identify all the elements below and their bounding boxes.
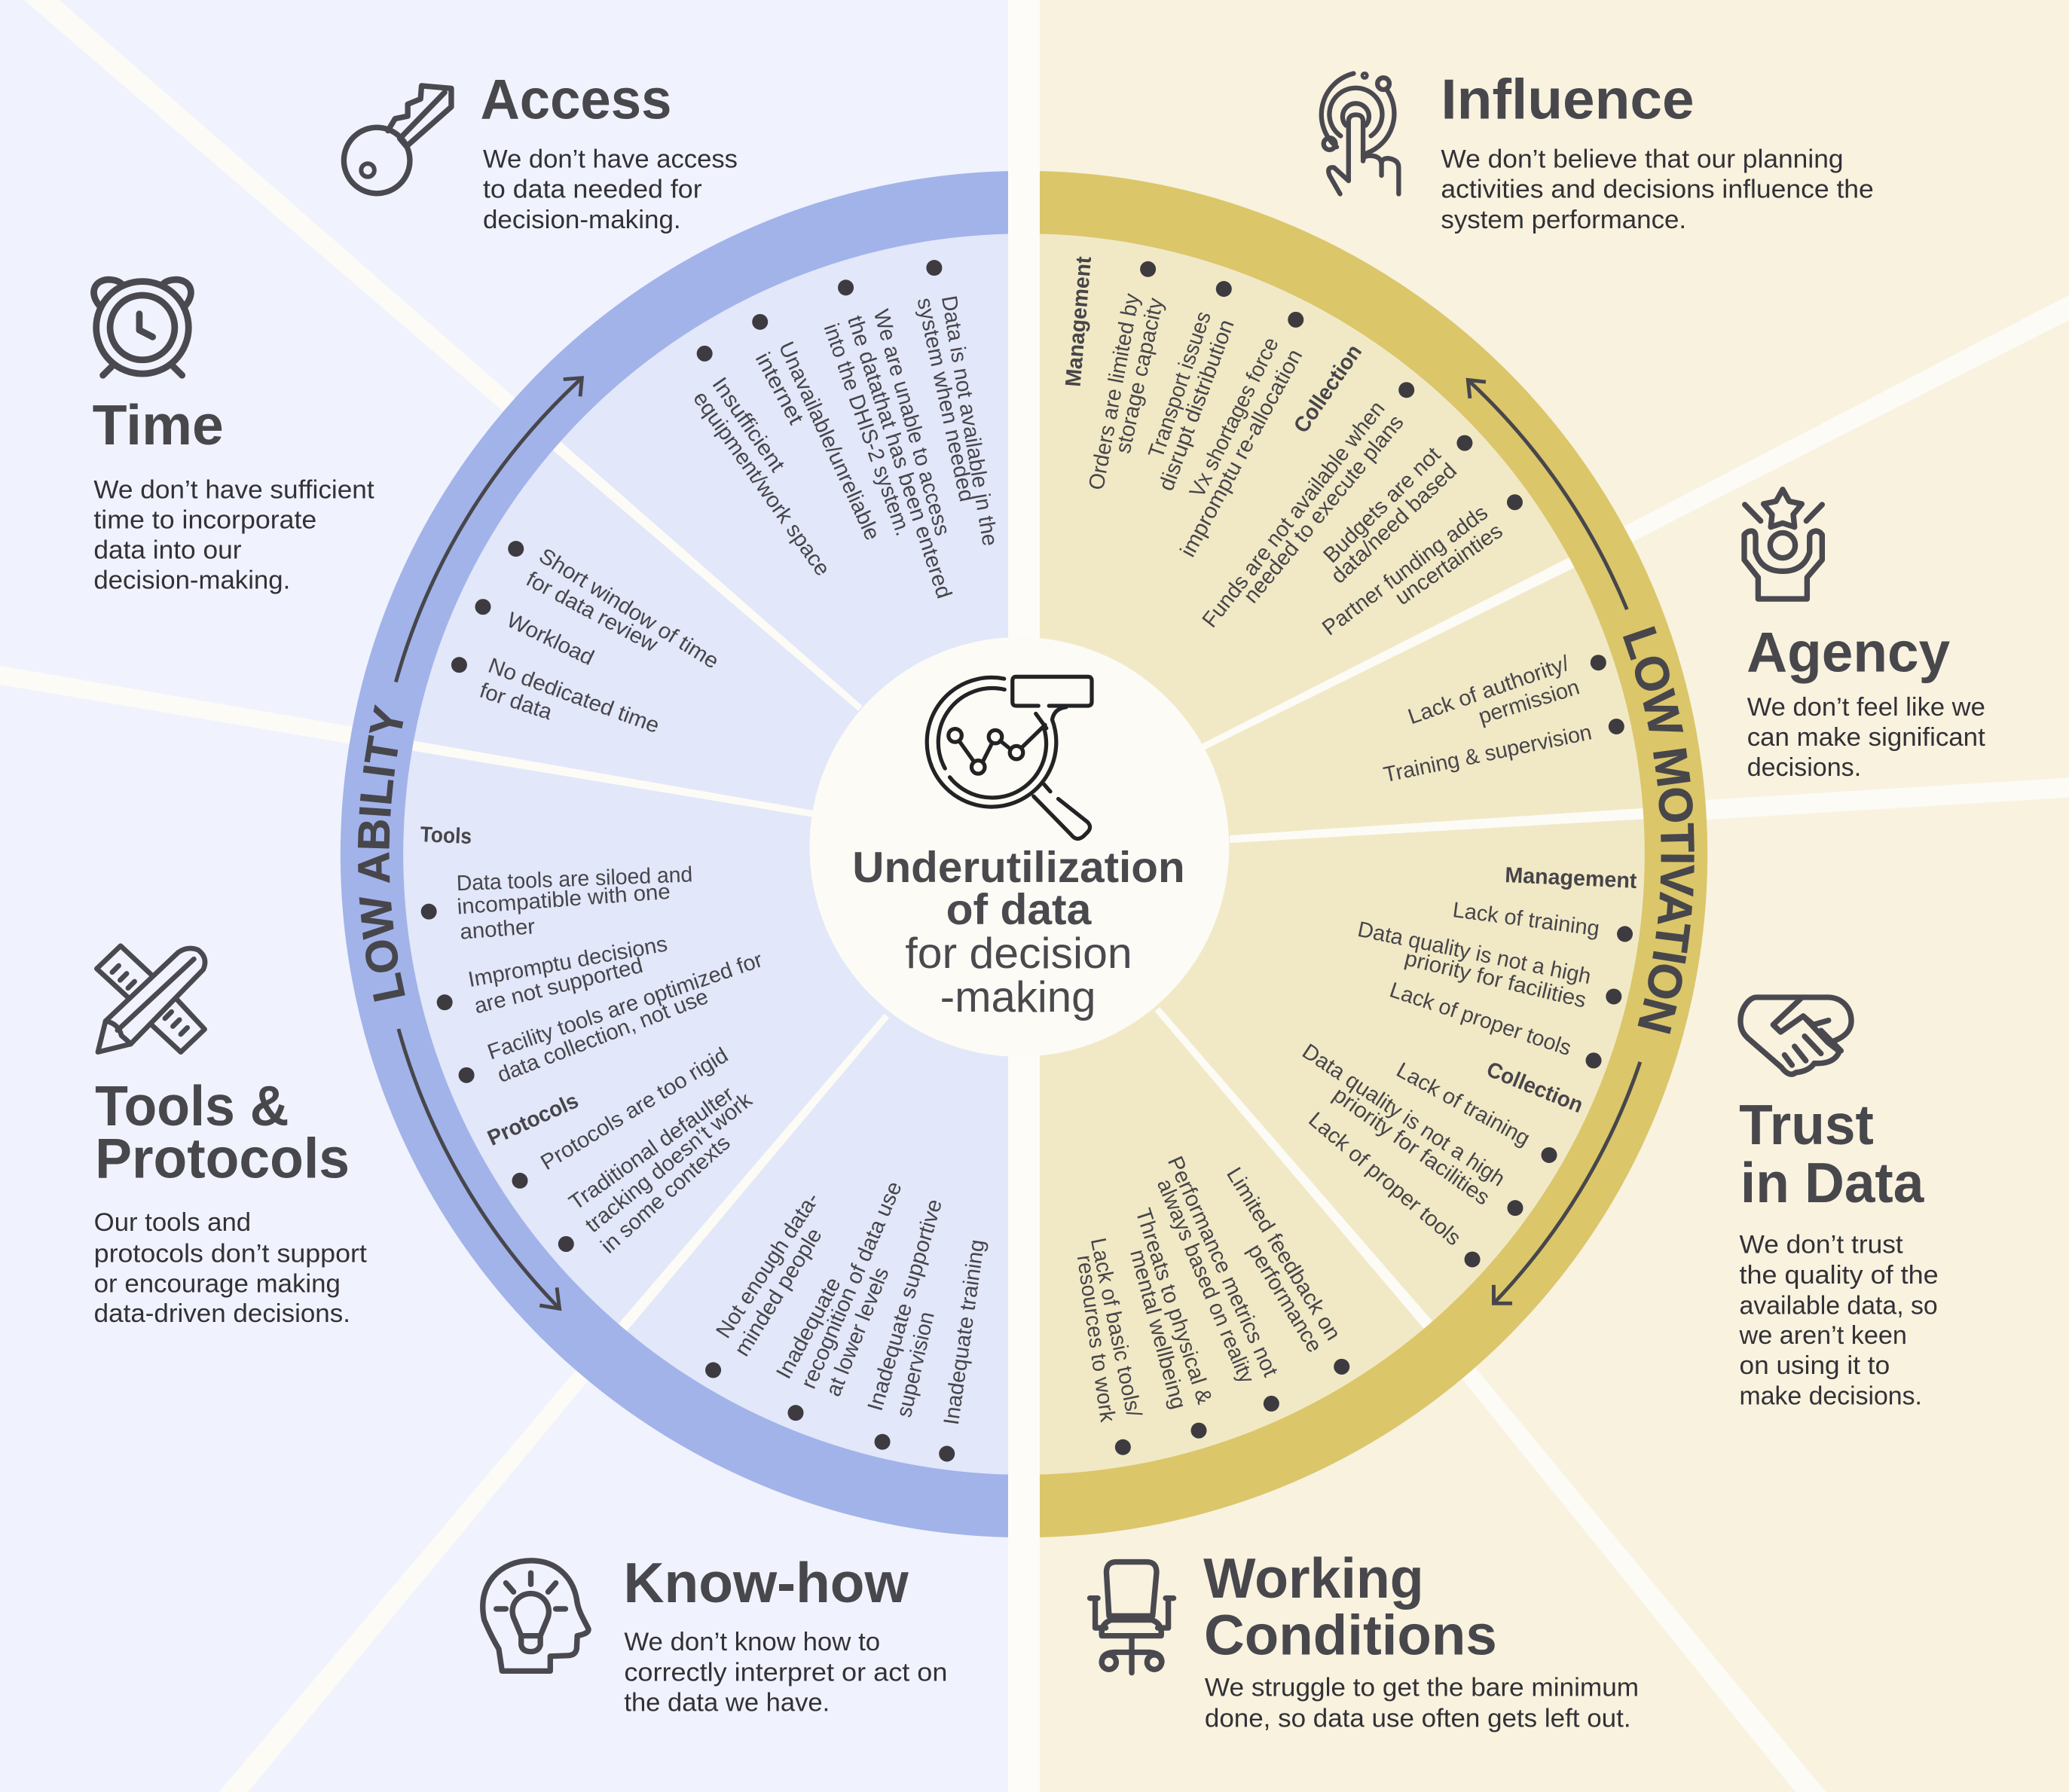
text: know-how description: correctly interpret or act on [624,1659,947,1687]
sector items: time: Workload [503,608,597,670]
wheel inner fill: motivation [1040,234,1645,1475]
heading: tools and protocols: Protocols [95,1127,350,1190]
text: time description [93,476,374,595]
sector items: access: system when needed [912,295,979,504]
panel: access [344,68,738,234]
sector items: access: into the DHIS-2 system. [819,321,915,539]
text: access description [483,145,738,234]
heading: know-how: Know-how [623,1551,909,1614]
panel: tools and protocols [94,946,367,1328]
arrow: ability downward [399,1029,560,1308]
text: agency description: We don’t feel like we [1747,693,1985,722]
panel: influence [1322,68,1874,234]
sector items: agency [1381,651,1624,787]
sector items: tools and protocols [420,823,766,1259]
arrow: ability upward [396,378,582,682]
heading: influence: Influence [1441,68,1695,131]
sector items: trust in data: Management [1505,863,1637,893]
text: influence description: activities and decisions influence the [1441,176,1874,204]
sector items: tools and protocols: Impromptu decisions [466,932,669,992]
sector items: influence [1062,255,1523,640]
text: access description: We don’t have access [483,145,738,173]
text: trust in data description: the quality of the [1740,1261,1939,1290]
icon: head with light bulb [483,1561,588,1671]
text: working conditions description: done, so data use often gets left out. [1205,1704,1631,1732]
text: time description: time to incorporate [93,506,316,535]
sector items: trust in data: priority for facilities [1402,946,1588,1013]
center title: Underutilization [852,844,1185,892]
icon: office chair [1090,1562,1174,1673]
sector items: time: Short window of time [535,544,723,674]
sector items: agency: permission [1476,675,1582,729]
sector items: tools and protocols: in some contexts [596,1131,735,1259]
heading: trust in data: Trust [1739,1093,1874,1156]
sector items: trust in data: Lack of proper tools [1303,1107,1465,1250]
icon: raised hands with star [1744,490,1822,599]
sector items: access: We are unable to access [869,307,955,539]
sector items: trust in data [1297,863,1637,1267]
sector items: influence: storage capacity [1111,295,1169,456]
sector items: influence: needed to execute plans [1239,411,1409,608]
sector items: working conditions: Threats to physical & [1130,1205,1217,1407]
sector items: tools and protocols: another [459,914,536,945]
sector items: tools and protocols: Traditional defaulter [565,1082,738,1215]
heading: time: Time [93,393,224,456]
text: trust in data description: make decisions. [1740,1381,1922,1410]
center circle [809,637,1229,1057]
panel: working conditions [1090,1546,1639,1732]
sector items: tools and protocols: are not supported [472,954,645,1018]
text: working conditions description: We struggle to get the bare minimum [1205,1674,1639,1702]
sector items: time: for data [476,679,556,725]
icon: alarm clock [93,279,191,375]
text: know-how description [624,1628,947,1717]
icon: touch target [1322,74,1398,194]
sector items: influence: Funds are not available when [1198,397,1390,632]
icon: magnifier over chart [927,676,1092,838]
sector items: influence: disrupt distribution [1154,316,1239,494]
icon: key [344,86,451,194]
sector items: influence: Budgets are not [1319,443,1445,568]
sector items: influence: Transport issues [1144,309,1216,461]
heading: working conditions [1203,1546,1497,1667]
text: trust in data description: on using it to [1740,1351,1890,1380]
sector items: trust in data: priority for facilities [1328,1083,1494,1210]
background: low ability half [0,0,1008,1792]
background: low motivation half [1040,0,2069,1792]
ring: low ability [341,171,1008,1537]
sector items: trust in data: Data quality is not a high [1297,1039,1509,1192]
heading: trust in data: in Data [1740,1151,1924,1214]
sector items: influence: impromptu re-allocation [1176,345,1307,561]
sector items: access: internet [750,349,808,429]
sector items: time: No dedicated time [485,654,662,738]
text: know-how description: the data we have. [624,1688,830,1717]
sector items: know-how: Not enough data- [711,1188,824,1342]
text: time description: data into our [93,536,241,565]
text: time description: We don’t have sufficient [93,476,374,505]
ring label: low ability: LOW ABILITY [357,704,405,1002]
sector items: know-how: Inadequate supportive [863,1196,947,1414]
sector items: agency: Lack of authority/ [1405,651,1573,729]
sector items: trust in data: Lack of training [1392,1058,1534,1151]
heading: working conditions: Conditions [1204,1604,1497,1667]
text: trust in data description: available data, so [1740,1291,1938,1320]
heading: tools and protocols: Tools & [95,1074,289,1137]
sector items: access [688,260,1002,601]
text: know-how description: We don’t know how to [624,1628,880,1656]
text: access description: decision-making. [483,206,681,234]
sector items: influence: Management [1062,255,1096,388]
text: agency description: can make significant [1747,723,1985,752]
sector items: access: Data is not available in the [937,294,1002,548]
sector items: time: for data review [522,567,662,657]
heading: agency: Agency [1747,620,1950,683]
sector items: know-how: supervision [892,1310,940,1420]
sector items: working conditions: Limited feedback on [1221,1163,1345,1345]
sector items: influence: data/need based [1326,459,1462,588]
sector items: tools and protocols: data collection, not use [494,985,711,1088]
sector items: tools and protocols: Tools [420,823,472,849]
text: influence description [1441,145,1874,234]
sector items: influence: Vx shortages force [1185,334,1284,502]
sector items: tools and protocols: Data tools are siloed and [456,862,693,896]
text: tools and protocols description [94,1208,367,1328]
sector items: working conditions: always based on reality [1152,1176,1259,1388]
text: agency description [1747,693,1985,782]
sector items: influence: Partner funding adds [1318,501,1493,640]
panel: know-how [483,1551,947,1717]
panel: agency [1744,490,1985,782]
sector items: access: equipment/work space [688,387,835,581]
text: time description: decision-making. [93,566,290,595]
background: central gap [1008,0,1040,1792]
text: working conditions description [1205,1674,1639,1732]
sector items: working conditions: Lack of basic tools/ [1086,1236,1146,1420]
sector items: trust in data: Data quality is not a high [1355,917,1593,989]
sector items: working conditions [1072,1152,1349,1455]
sector items: know-how: recognition of data use [796,1178,907,1392]
panel: trust in data [1739,997,1939,1410]
text: trust in data description: we aren’t keen [1739,1321,1907,1350]
sector items: know-how: Inadequate [772,1273,846,1383]
sector items: know-how: Inadequate training [940,1238,990,1427]
arrow: motivation downward [1493,1062,1640,1303]
heading: trust in data [1739,1093,1924,1214]
sector items: tools and protocols: tracking doesn’t work [581,1088,757,1238]
sector items: working conditions: performance [1242,1240,1327,1357]
wheel inner fill: ability [403,234,1008,1475]
sector items: working conditions: mental wellbeing [1125,1247,1190,1412]
text: influence description: system performance. [1441,206,1686,234]
heading: tools and protocols [95,1074,350,1190]
center title: for decision [905,930,1132,978]
sector items: working conditions: Performance metrics not [1163,1152,1282,1381]
text: influence description: We don’t believe that our planning [1441,145,1844,173]
sector items: know-how: minded people [730,1224,827,1360]
heading: working conditions: Working [1203,1546,1424,1610]
icon: handshake [1740,997,1851,1074]
heading: access: Access [480,68,671,131]
sector items: influence: Orders are limited by [1084,292,1145,492]
sector items: access: Insufficient [707,373,789,477]
sector items: time [451,541,723,738]
center title: -making [940,973,1096,1021]
sector items: tools and protocols: Protocols [484,1088,582,1151]
text: trust in data description [1739,1231,1939,1410]
text: access description: to data needed for [483,176,702,204]
text: tools and protocols description: data-driven decisions. [94,1299,350,1328]
sector items: trust in data: Lack of training [1451,898,1601,942]
text: tools and protocols description: or encourage making [94,1269,341,1298]
sector items: access: the datathat has been entered [842,313,956,601]
sector items: influence: Collection [1289,340,1367,438]
text: tools and protocols description: Our tools and [94,1208,251,1237]
sector items: tools and protocols: Facility tools are optimized for [484,948,766,1064]
sector items: trust in data: Lack of proper tools [1386,978,1574,1061]
sector items: know-how [705,1178,990,1461]
sector items: tools and protocols: Protocols are too rigid [536,1043,732,1175]
sector items: agency: Training & supervision [1381,720,1594,787]
text: trust in data description: We don’t trust [1740,1231,1903,1259]
sector items: tools and protocols: incompatible with one [457,880,671,920]
sector items: working conditions: resources to work [1072,1253,1120,1424]
ring label: low motivation: LOW MOTIVATION [1623,626,1695,1034]
text: agency description: decisions. [1747,753,1861,782]
arrow: motivation upward [1468,380,1627,609]
icon: pencil and ruler [96,946,205,1052]
sector items: access: Unavailable/unreliable [774,338,885,544]
ring: low motivation [1040,171,1707,1537]
sector items: know-how: at lower levels [821,1264,894,1400]
text: tools and protocols description: protocols don’t support [94,1239,367,1268]
center title [852,844,1185,1021]
panel: time [93,279,374,595]
sector items: trust in data: Collection [1483,1058,1586,1118]
sector items: influence: uncertainties [1391,519,1507,610]
center title: of data [946,886,1092,934]
